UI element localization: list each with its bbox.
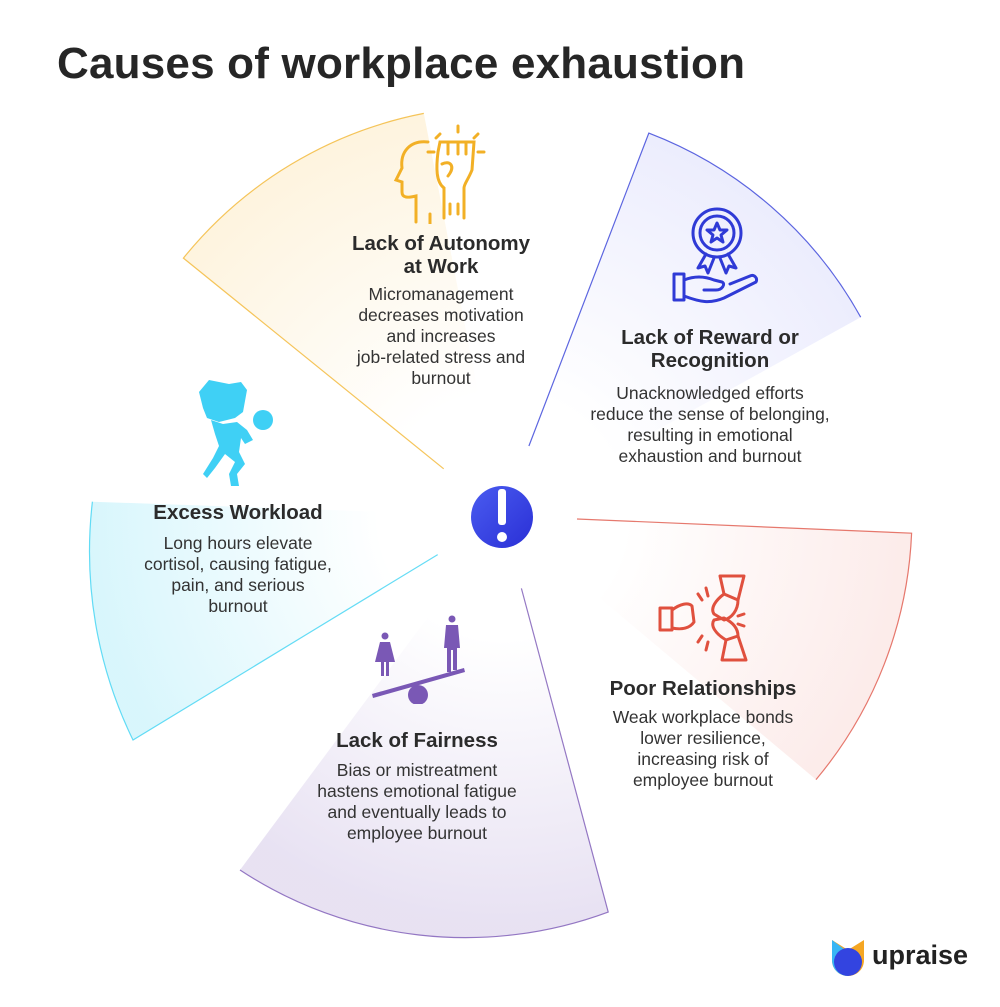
sector: red: [559, 519, 912, 780]
heading + text: reward: [590, 326, 830, 466]
heading + text: reward: reduce the sense of belonging,: [590, 404, 830, 424]
sector: yellow: [183, 113, 488, 469]
heading + text: fairness: Bias or mistreatment: [337, 760, 497, 780]
heading + text: reward: Unacknowledged efforts: [616, 383, 804, 403]
heading + text: reward: resulting in emotional: [627, 425, 793, 445]
icon: fist bumps: [658, 574, 748, 662]
heading + text: reward: exhaustion and burnout: [619, 446, 801, 466]
heading + text: fairness: Lack of Fairness: [336, 729, 498, 752]
heading + text: autonomy: burnout: [411, 368, 471, 388]
heading + text: workload: burnout: [208, 596, 268, 616]
title: Causes of workplace exhaustion: [57, 39, 745, 88]
heading + text: workload: Long hours elevate: [164, 533, 312, 553]
sector: blue: [529, 133, 861, 480]
heading + text: workload: cortisol, causing fatigue,: [144, 554, 332, 574]
heading + text: relationships: increasing risk of: [637, 749, 769, 769]
heading + text: relationships: employee burnout: [633, 770, 773, 790]
heading + text: relationships: [610, 677, 796, 790]
logo: upraise: [832, 940, 968, 976]
heading + text: autonomy: and increases: [387, 326, 495, 346]
logo: upraise: upraise: [872, 940, 968, 970]
heading + text: fairness: and eventually leads to: [327, 802, 507, 822]
icon: award in hand: [672, 208, 758, 304]
heading + text: reward: Lack of Reward or: [621, 326, 799, 349]
heading + text: autonomy: Lack of Autonomy: [352, 232, 530, 255]
heading + text: autonomy: [352, 232, 530, 388]
heading + text: relationships: Poor Relationships: [610, 677, 796, 700]
heading + text: relationships: Weak workplace bonds: [613, 707, 793, 727]
icon: head and fist: [394, 124, 486, 224]
icon: person carrying load: [199, 380, 273, 486]
heading + text: workload: [144, 501, 332, 616]
heading + text: fairness: [317, 729, 517, 843]
heading + text: autonomy: decreases motivation: [358, 305, 524, 325]
heading + text: autonomy: Micromanagement: [369, 284, 513, 304]
heading + text: fairness: hastens emotional fatigue: [317, 781, 517, 801]
sector: cyan: [90, 502, 438, 740]
heading + text: reward: Recognition: [651, 349, 769, 372]
heading + text: fairness: employee burnout: [347, 823, 487, 843]
heading + text: relationships: lower resilience,: [640, 728, 766, 748]
icon: fairness seesaw: [372, 616, 465, 704]
heading + text: autonomy: at Work: [404, 255, 478, 278]
heading + text: workload: pain, and serious: [171, 575, 305, 595]
sector: purple: [240, 577, 608, 938]
icon: center exclamation: [471, 486, 533, 548]
heading + text: autonomy: job-related stress and: [357, 347, 525, 367]
heading + text: workload: Excess Workload: [153, 501, 323, 524]
